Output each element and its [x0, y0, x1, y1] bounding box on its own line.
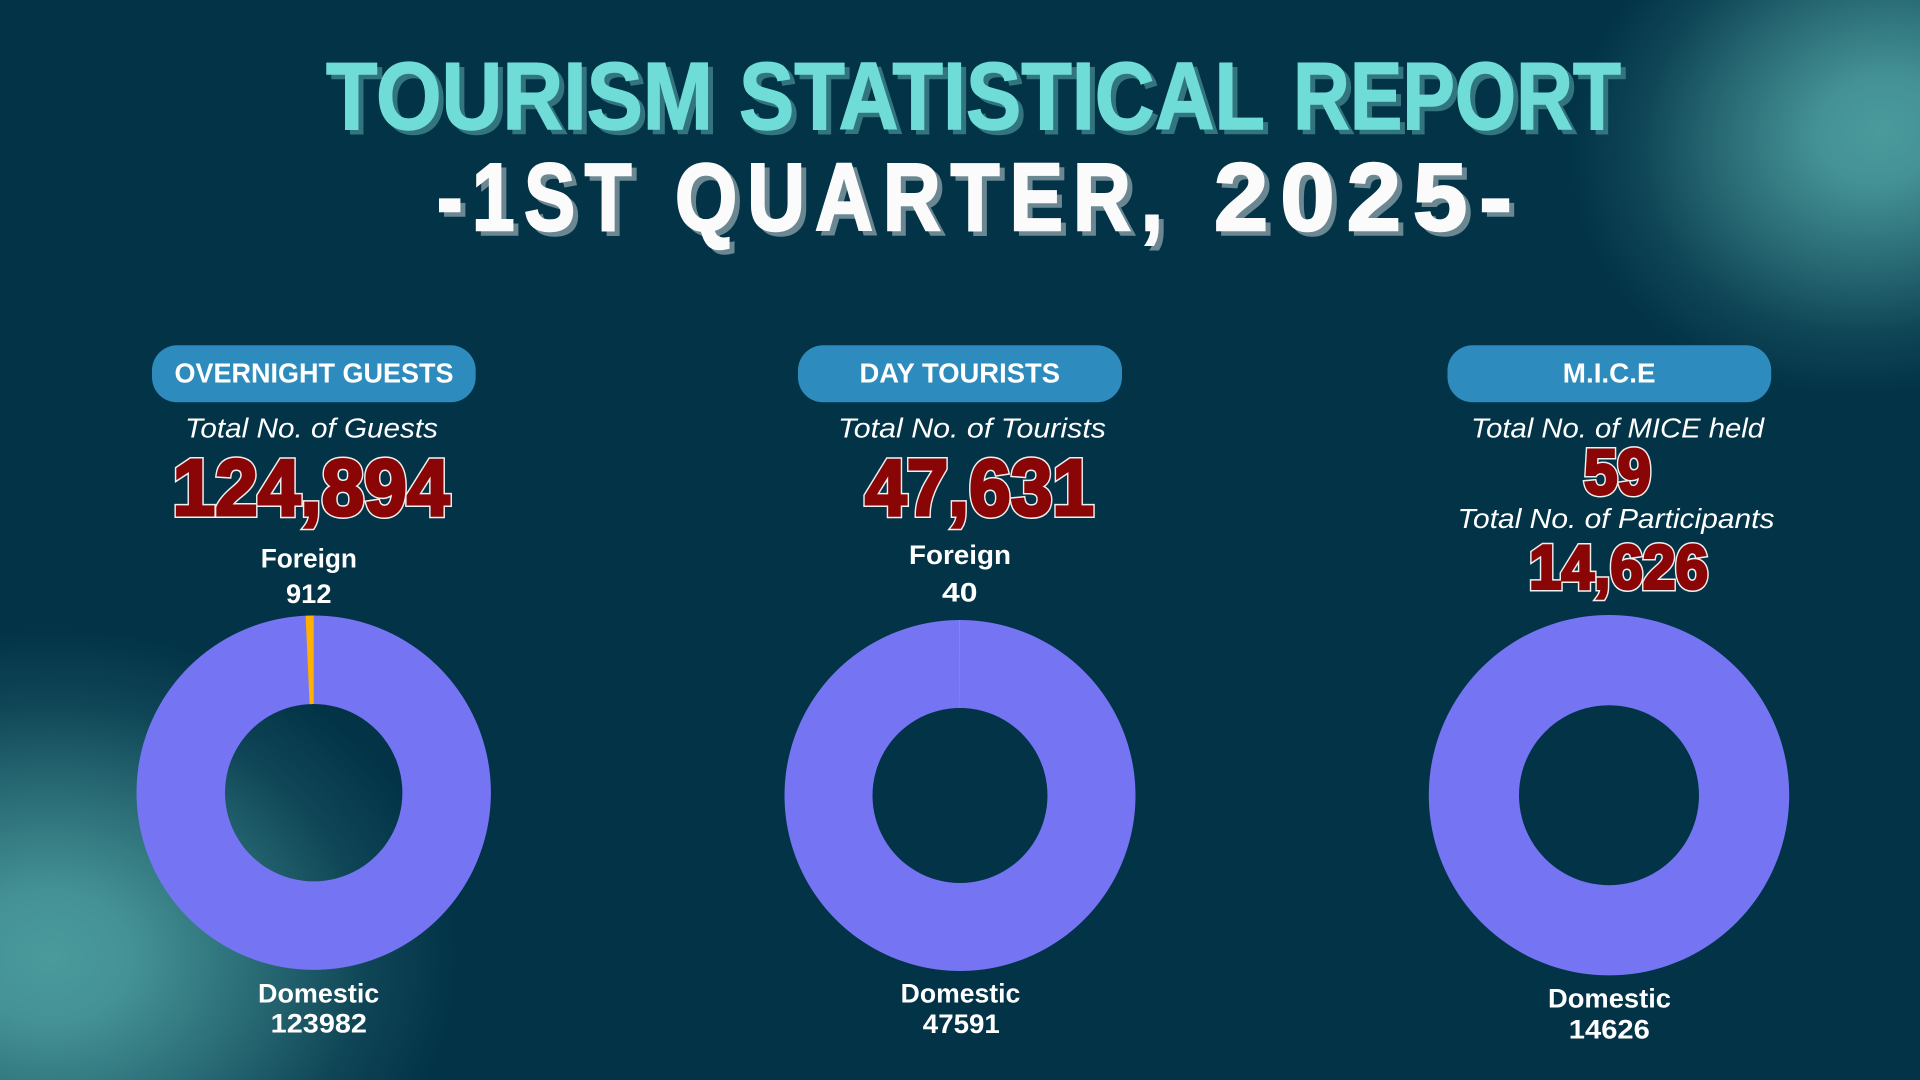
- title line 2: 2025-: [1219, 148, 1529, 256]
- label: domestic tourists: 47591: [923, 1009, 1000, 1039]
- label: foreign guests: [261, 543, 357, 609]
- total MICE label: Total No. of MICE held: [1471, 412, 1766, 443]
- heading pill: day tourists: DAY TOURISTS: [860, 357, 1060, 388]
- total guests label: Total No. of Guests: [185, 412, 438, 443]
- label: domestic participants: [1548, 984, 1671, 1045]
- title line 2: QUARTER,: [675, 144, 1173, 251]
- title line 1: STATISTICAL: [739, 43, 1265, 150]
- title line 2: QUARTER,: [680, 148, 1178, 256]
- total MICE number: 59: [1584, 436, 1651, 508]
- title line 2: -1ST: [437, 144, 641, 251]
- total guests number: 124,894: [172, 443, 450, 532]
- label: foreign guests: Foreign: [261, 543, 357, 573]
- total tourists number: 47,631: [865, 443, 1094, 532]
- heading pill: MICE: [1448, 345, 1771, 402]
- title: [326, 43, 1626, 256]
- title line 1: TOURISM: [326, 43, 713, 150]
- label: domestic guests: Domestic: [258, 978, 379, 1008]
- title line 1: [326, 43, 1626, 154]
- title line 1: STATISTICAL: [744, 48, 1270, 154]
- label: foreign tourists: Foreign: [909, 540, 1011, 570]
- total tourists number: 47,631: [865, 443, 1094, 532]
- label: foreign guests: 912: [286, 579, 332, 609]
- label: domestic guests: [258, 978, 379, 1039]
- label: foreign tourists: 40: [942, 578, 978, 608]
- label: domestic participants: Domestic: [1548, 984, 1671, 1014]
- heading pill: overnight guests: OVERNIGHT GUESTS: [174, 357, 454, 388]
- label: domestic participants: 14626: [1569, 1015, 1650, 1045]
- panel: overnight guests: [137, 345, 491, 1039]
- total participants number: 14,626: [1529, 534, 1708, 602]
- donut chart: day tourists: [785, 620, 1136, 971]
- total MICE number: 59: [1584, 436, 1651, 508]
- total guests number: 124,894: [172, 443, 450, 532]
- title line 1: TOURISM: [331, 48, 718, 154]
- donut chart: MICE: [1429, 615, 1789, 975]
- donut chart: overnight guests: [137, 616, 491, 970]
- title line 1: REPORT: [1293, 43, 1621, 150]
- label: domestic tourists: Domestic: [901, 978, 1020, 1008]
- title line 2: -1ST: [442, 148, 646, 256]
- title line 2: 2025-: [1214, 144, 1524, 251]
- title line 1: REPORT: [1298, 48, 1626, 154]
- panel: MICE: [1429, 345, 1789, 1045]
- heading pill: overnight guests: [152, 345, 476, 402]
- heading pill: MICE: M.I.C.E: [1563, 357, 1656, 388]
- label: domestic tourists: [901, 978, 1020, 1039]
- label: foreign tourists: [909, 540, 1011, 608]
- total tourists label: Total No. of Tourists: [838, 412, 1106, 443]
- label: domestic guests: 123982: [271, 1009, 367, 1039]
- title line 2: [437, 144, 1529, 256]
- heading pill: day tourists: [798, 345, 1122, 402]
- total participants label: Total No. of Participants: [1458, 503, 1775, 534]
- panel: day tourists: [785, 345, 1136, 1039]
- total participants number: 14,626: [1529, 534, 1708, 602]
